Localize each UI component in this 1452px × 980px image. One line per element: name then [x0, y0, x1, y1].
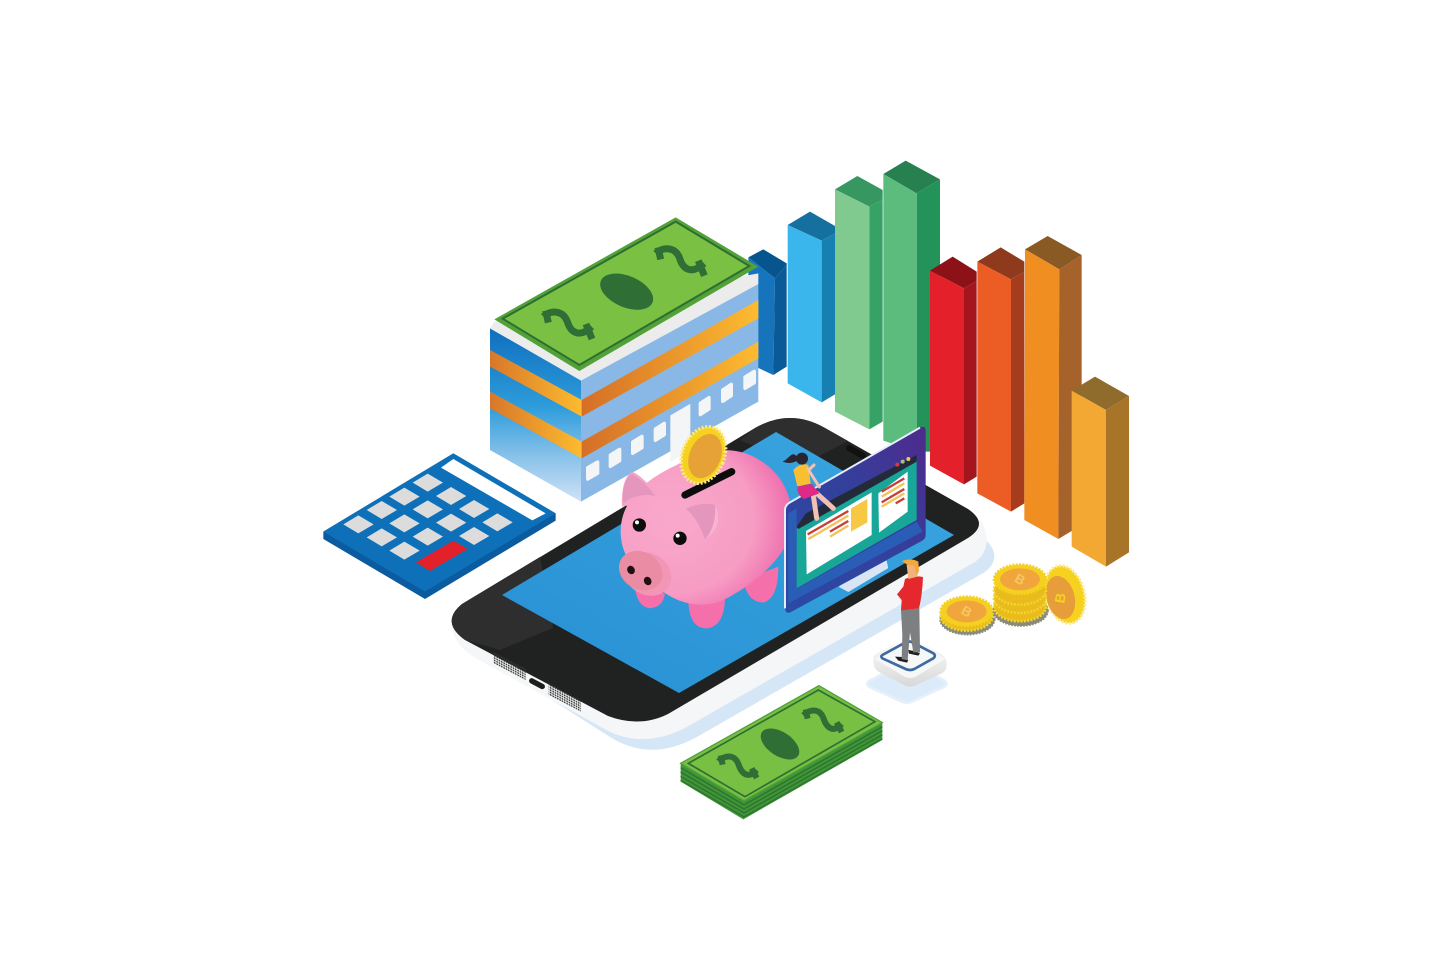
screen [502, 432, 954, 693]
leaning coin: B [1051, 592, 1069, 604]
phone [452, 418, 987, 739]
legs [813, 493, 833, 518]
bank building topped with banknote [490, 217, 758, 502]
shoes [895, 650, 920, 663]
calculator body [323, 453, 556, 599]
platform top [875, 639, 945, 678]
chart: red and orange bars [930, 236, 1129, 567]
tablet frame [785, 427, 926, 613]
coin slot [685, 472, 732, 495]
speaker grille and port [493, 652, 581, 712]
coin stack [993, 565, 1048, 626]
eyes [633, 518, 687, 545]
stack sides [681, 723, 882, 819]
head [907, 562, 918, 579]
bezel highlights [452, 418, 848, 650]
yellow block [851, 499, 867, 532]
bar: orange red [977, 247, 1024, 512]
calculator [323, 453, 556, 599]
hair [902, 559, 919, 576]
single coin [940, 597, 995, 635]
building left face [490, 328, 581, 502]
bar: orange [1024, 236, 1082, 539]
head and ponytail [783, 453, 808, 465]
bar: amber [1072, 377, 1129, 567]
display [441, 459, 546, 520]
right ear [686, 504, 715, 539]
windows and door [588, 371, 754, 479]
single coin: B [959, 603, 975, 621]
bar: light blue [788, 212, 835, 402]
stack of banknotes [681, 686, 882, 819]
left ear back [622, 472, 659, 507]
phone bezel [452, 418, 979, 722]
coin entering slot [673, 420, 734, 490]
note oval [755, 722, 805, 766]
skirt [797, 484, 819, 499]
header bar [797, 455, 917, 529]
keys [343, 474, 513, 560]
frame highlight [785, 428, 920, 608]
left card [806, 492, 872, 574]
snout [612, 543, 679, 604]
man on platform [867, 559, 947, 703]
orange bands [490, 300, 758, 458]
tablet stand [840, 562, 887, 591]
bar: red [930, 257, 977, 484]
bar: light green [835, 176, 883, 429]
text lines [808, 478, 904, 539]
phone body [452, 430, 987, 739]
chart: blue and green bars [748, 161, 940, 452]
arm [808, 465, 819, 487]
coin stack: B [1012, 571, 1028, 589]
tablet with dashboard [785, 427, 926, 613]
torso [793, 464, 811, 486]
torso [897, 576, 923, 610]
bar: green [883, 161, 940, 452]
camera [845, 444, 867, 460]
top note [681, 686, 882, 801]
banknote [494, 217, 758, 371]
platform [873, 638, 947, 687]
left ear [623, 474, 655, 503]
red key [416, 541, 468, 571]
note border [688, 690, 875, 797]
pig legs [635, 567, 778, 628]
teal panel [797, 460, 917, 588]
platform shadow [867, 674, 947, 703]
dollar signs [718, 709, 842, 778]
phone shadow [466, 535, 994, 750]
pig body [621, 450, 792, 605]
bitcoin coins [940, 561, 1091, 635]
roof strip [490, 273, 758, 381]
building right face [581, 283, 758, 502]
right card [878, 472, 908, 533]
leaning coin [1039, 561, 1091, 628]
legs [901, 608, 920, 660]
right ear edge [705, 505, 718, 539]
platform ring [881, 641, 935, 670]
browser dots [895, 457, 910, 467]
bar: dark blue [748, 249, 787, 375]
piggy bank [612, 420, 792, 628]
inner bezel [788, 508, 923, 603]
woman sitting on tablet [783, 453, 833, 518]
